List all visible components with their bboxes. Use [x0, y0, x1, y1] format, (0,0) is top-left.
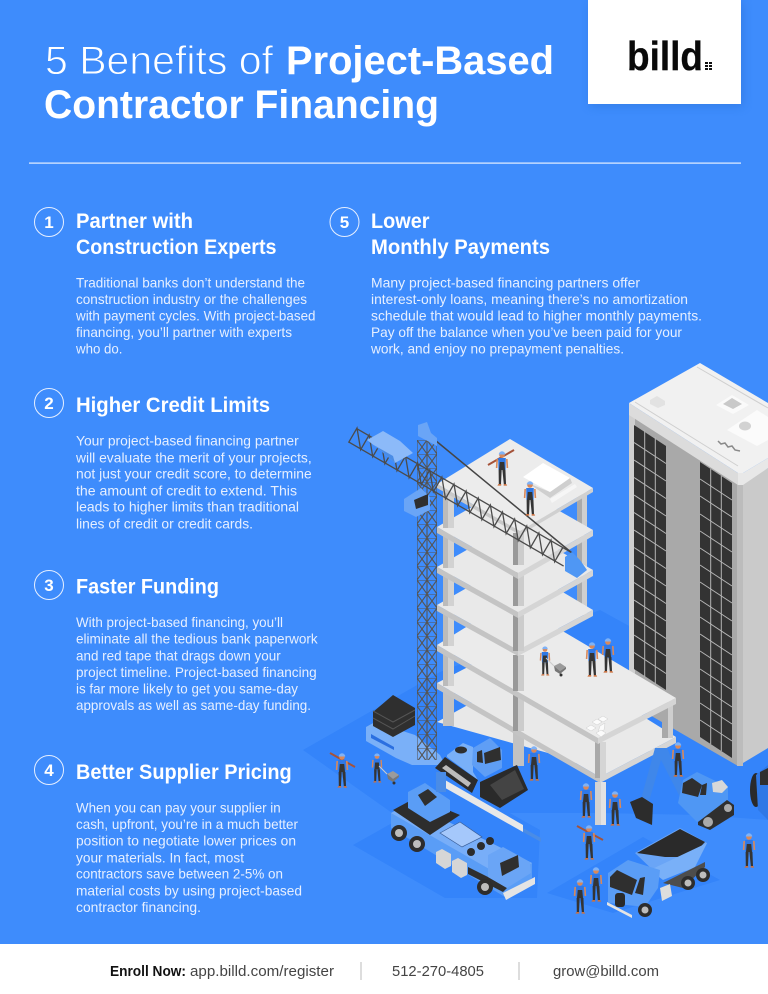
benefit 5: Many project-based financing partners offer: [371, 274, 640, 290]
benefit 3: eliminate all the tedious bank paperwork: [76, 631, 319, 647]
benefit 3: [34, 570, 319, 713]
title: Contractor Financing: [44, 83, 439, 127]
benefit 1: who do.: [75, 341, 122, 357]
truck cab: [488, 847, 531, 888]
benefit 5: interest-only loans, meaning there’s no amortization: [371, 291, 688, 307]
benefit 1: Construction Experts: [76, 236, 276, 259]
benefit 4: [34, 756, 302, 915]
benefit 4: material costs by using project-based: [76, 882, 302, 898]
footer bar: Enroll Now:: [110, 964, 186, 980]
jib end: [565, 552, 587, 578]
benefit 3: and red tape that drags down your: [76, 647, 281, 663]
benefit 5: schedule that would lead to higher monthly payments.: [371, 308, 702, 324]
excavator: [630, 748, 734, 830]
tower crane: [348, 422, 587, 765]
benefit 4: When you can pay your supplier in: [76, 800, 281, 816]
workers: [330, 450, 754, 914]
benefit 4: contractors save between 2-5% on: [76, 866, 283, 882]
title: 5 Benefits of: [45, 39, 274, 83]
concrete structure: [437, 439, 676, 825]
rooftop equipment: [650, 395, 768, 451]
footer bar: grow@billd.com: [553, 964, 659, 980]
benefit 2: leads to higher limits than traditional: [76, 499, 299, 515]
benefit 2: the amount of credit to extend. This: [76, 482, 297, 498]
benefit 2: 2: [44, 394, 54, 413]
stacked floors: [437, 439, 593, 691]
lowest floors: [437, 600, 676, 825]
deck panel: [440, 822, 482, 847]
wheels: [391, 825, 493, 895]
benefit 5: [330, 208, 702, 357]
benefit 2: will evaluate the merit of your projects,: [75, 449, 312, 465]
bricks: [586, 716, 608, 737]
benefit 5: Pay off the balance when you’ve been paid for your: [371, 324, 682, 340]
boom: [440, 778, 523, 832]
ground shadows: [303, 610, 768, 913]
benefit 1: [34, 208, 316, 357]
benefit 5: Lower: [371, 210, 430, 233]
benefit 1: construction industry or the challenges: [76, 291, 307, 307]
benefit 5: 5: [340, 213, 349, 232]
turret cab: [408, 783, 450, 822]
bulldozer: [435, 738, 528, 808]
dump truck: [607, 828, 710, 918]
stacked boards: [523, 463, 577, 503]
benefit 1: Traditional banks don’t understand the: [76, 274, 305, 290]
tall office building: [629, 363, 768, 766]
benefit 1: financing, you’ll partner with experts: [76, 324, 292, 340]
window column left: [634, 425, 666, 690]
benefit 4: Better Supplier Pricing: [76, 761, 292, 784]
benefit 3: approvals as well as same-day funding.: [76, 697, 311, 713]
mast top: [418, 422, 437, 446]
benefit 3: is far more likely to get you same-day: [76, 680, 298, 696]
benefit 4: 4: [44, 761, 54, 780]
cab: [404, 488, 430, 517]
benefit 2: lines of credit or credit cards.: [76, 515, 253, 531]
roof: [629, 363, 768, 473]
counterweight: [367, 431, 413, 463]
benefit 1: Partner with: [76, 210, 193, 233]
footer bar: 512-270-4805: [392, 964, 484, 980]
crane platform: [366, 695, 445, 765]
vehicle at right edge: [750, 765, 768, 820]
benefit 3: project timeline. Project-based financing: [76, 664, 317, 680]
divider: [29, 162, 741, 164]
benefit 1: 1: [44, 213, 54, 232]
title: [44, 39, 554, 127]
benefit 5: work, and enjoy no prepayment penalties.: [370, 341, 624, 357]
logo card: [588, 0, 743, 106]
benefit 3: With project-based financing, you’ll: [76, 614, 283, 630]
logo card: billd: [627, 33, 703, 79]
benefit 4: cash, upfront, you’re in a much better: [76, 816, 298, 832]
benefit 1: with payment cycles. With project-based: [75, 308, 315, 324]
footer bar: app.billd.com/register: [190, 964, 334, 980]
benefit 4: position to negotiate lower prices on: [76, 833, 296, 849]
benefit 2: not just your credit score, to determine: [76, 466, 312, 482]
jib: [348, 428, 572, 567]
benefit 2: [34, 388, 312, 531]
illustration: construction site: [303, 363, 768, 918]
turntable: [393, 797, 460, 835]
crane truck: [391, 772, 541, 900]
footer bar: [0, 944, 768, 994]
benefit 4: your materials. In fact, most: [76, 849, 244, 865]
benefit 4: contractor financing.: [76, 899, 201, 915]
benefit 2: Higher Credit Limits: [76, 394, 270, 417]
benefit 3: 3: [44, 576, 54, 595]
title: Project-Based: [286, 39, 554, 83]
benefit 5: Monthly Payments: [371, 236, 550, 259]
lattice mast: [417, 440, 437, 760]
window column right: [700, 462, 732, 758]
cable: [424, 431, 572, 553]
benefit 2: Your project-based financing partner: [76, 433, 299, 449]
benefit 3: Faster Funding: [76, 576, 219, 599]
